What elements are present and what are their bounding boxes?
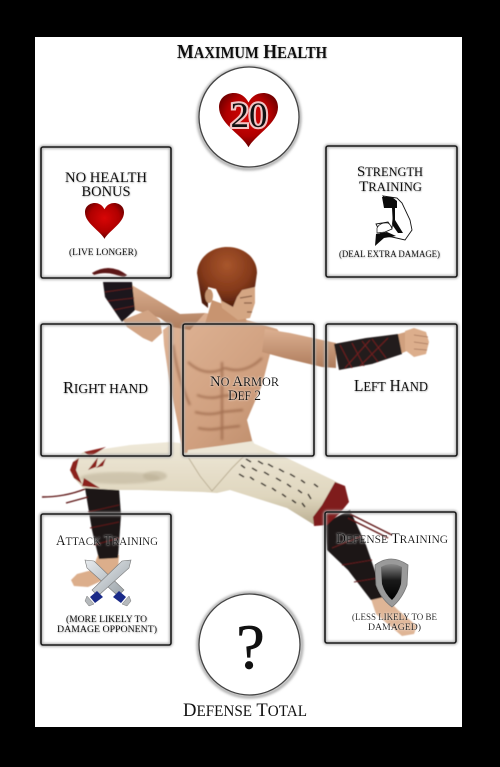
label: RIGHT HAND: [63, 378, 148, 397]
icon: crossed swords: [85, 560, 131, 606]
trousers: [70, 442, 340, 526]
panel heading: BONUS: [82, 184, 130, 200]
armor label: NO ARMOR: [210, 374, 280, 390]
heading: defense total: DEFENSE TOTAL: [183, 700, 307, 721]
back foot: [71, 555, 119, 587]
icon: flexed arm: [375, 196, 412, 246]
caption: (MORE LIKELY TO: [66, 614, 147, 625]
raised arm: [130, 284, 205, 330]
health value: 20: [230, 95, 268, 135]
back shin wrap: [85, 488, 121, 559]
eye and brow shading: [240, 296, 252, 312]
red trouser cuff: [313, 482, 349, 526]
icon: heart: [85, 203, 124, 239]
caption: DAMAGE OPPONENT): [57, 624, 157, 635]
caption: [352, 612, 437, 633]
panel heading: TRAINING: [359, 179, 422, 195]
panel: armor: [183, 324, 314, 456]
panel: defense training: [325, 512, 456, 643]
wrist wrap: [334, 334, 402, 370]
ear: [205, 289, 213, 303]
forearm: [395, 331, 409, 355]
armor label: DEF 2: [228, 388, 261, 404]
caption: DAMAGED): [368, 622, 421, 633]
abdominal shading: [173, 345, 262, 440]
heading: maximum health: MAXIMUM HEALTH: [177, 41, 327, 63]
waistband: [186, 441, 258, 458]
defense circle: [198, 593, 302, 697]
face: [218, 282, 255, 320]
icon: shield: [375, 559, 408, 607]
extended arm: [262, 329, 336, 368]
panel: strength training: [326, 146, 457, 277]
panel: right hand: [41, 324, 171, 456]
panel heading: ATTACK TRAINING: [56, 533, 158, 549]
label: LEFT HAND: [354, 376, 428, 395]
panel: attack training: [41, 514, 171, 645]
upper wrist wrap: [103, 282, 135, 322]
loose red straps: [42, 489, 392, 538]
torso: [163, 313, 290, 453]
caption: (DEAL EXTRA DAMAGE): [339, 249, 440, 260]
panel heading: [357, 164, 423, 195]
panel heading: NO HEALTH: [65, 170, 147, 186]
front foot: [370, 596, 417, 636]
panel heading: STRENGTH: [357, 164, 423, 180]
neck: [205, 300, 247, 325]
martial artist figure: [42, 247, 429, 636]
bent forearm and hand: [123, 310, 162, 342]
caption: (LESS LIKELY TO BE: [352, 612, 437, 623]
red knee marks: [70, 447, 106, 488]
armor label: [210, 374, 280, 404]
caption: (LIVE LONGER): [69, 247, 137, 258]
caption: [57, 614, 157, 635]
front shin wrap: [325, 510, 384, 600]
trouser calligraphy: [239, 459, 318, 507]
panel: no health bonus: [41, 147, 171, 278]
clenched fist: [405, 328, 429, 357]
hair: [197, 247, 257, 308]
panel heading: DEFENSE TRAINING: [336, 531, 448, 547]
panel: left hand: [326, 324, 457, 456]
question mark: ?: [236, 611, 265, 682]
trouser folds: [188, 452, 248, 491]
icon: large heart: [219, 93, 278, 147]
health circle: [198, 67, 300, 169]
white page panel: [35, 37, 462, 727]
panel heading: [65, 170, 147, 200]
wrap ribbon: [92, 268, 127, 278]
